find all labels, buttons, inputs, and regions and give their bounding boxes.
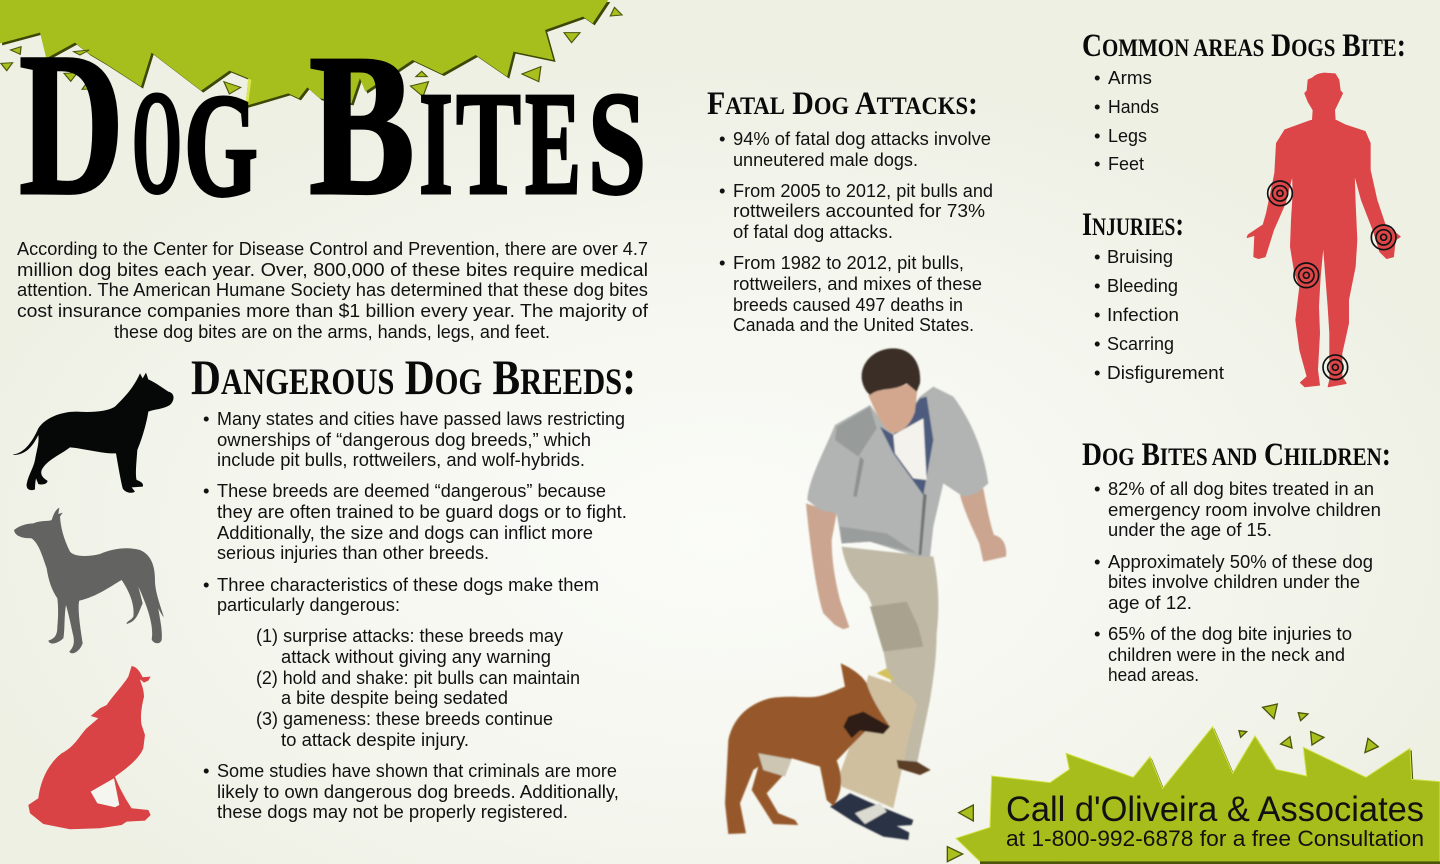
text block: fatal attacks list: From 1982 to 2012, pit bulls, (733, 252, 964, 273)
target: ankle (1323, 355, 1348, 380)
footer green starburst callout (947, 704, 1440, 864)
text block: dangerous breeds list: attack without giving any warning (281, 646, 551, 667)
text block: injuries list (1094, 246, 1224, 383)
dog (725, 663, 890, 834)
text block: dangerous breeds list (203, 408, 627, 822)
heading: Fatal Dog Attacks: FATAL DOG ATTACKS: (707, 86, 978, 122)
icon: human body with bite targets (1247, 73, 1400, 387)
text block: common areas list: Arms (1108, 67, 1152, 88)
text block: injuries list: Scarring (1107, 333, 1174, 354)
text block: dangerous breeds list: Three characteristics of these dogs make them (217, 574, 599, 595)
text block: children list: under the age of 15. (1108, 519, 1272, 540)
face (868, 383, 917, 433)
text block: dangerous breeds list: • (203, 480, 209, 501)
text block: children list (1094, 478, 1381, 685)
text block: dangerous breeds list: Many states and cities have passed laws restricting (217, 408, 625, 429)
text block: children list: • (1094, 478, 1100, 499)
title: Dog Bites: O (132, 61, 182, 225)
text block: dangerous breeds list: to attack despite injury. (281, 729, 469, 750)
text block: dangerous breeds list: Some studies have shown that criminals are more (217, 760, 617, 781)
callout text: Call d'Oliveira & Associates (1006, 790, 1424, 829)
text block: fatal attacks list: • (719, 180, 725, 201)
text block: dangerous breeds list: serious injuries than other breeds. (217, 542, 489, 563)
text block: injuries list: Disfigurement (1107, 362, 1224, 383)
text block: fatal attacks list: rottweilers accounted for 73% (733, 200, 985, 221)
target: upper arm (1268, 181, 1292, 206)
text block: fatal attacks list: 94% of fatal dog attacks involve (733, 128, 991, 149)
title: Dog Bites: T (456, 62, 521, 226)
text block: children list: bites involve children under the (1108, 571, 1360, 592)
text block: dangerous breeds list: (2) hold and shake: pit bulls can maintain (256, 667, 580, 688)
text block: common areas list: Feet (1108, 153, 1144, 174)
title: Dog Bites: S (588, 62, 646, 226)
text block: dangerous breeds list: these dogs may not be properly registered. (217, 801, 568, 822)
intro paragraph: these dog bites are on the arms, hands, legs, and feet. (114, 321, 550, 342)
heading: Common Areas Dogs Bite: COMMON AREAS DOGS BITE: (1082, 28, 1406, 64)
text block: dangerous breeds list: • (203, 408, 209, 429)
intro paragraph: cost insurance companies more than $1 billion every year. The majority of (17, 300, 649, 321)
text block: injuries list: • (1094, 333, 1100, 354)
title: Dog Bites: G (184, 64, 258, 228)
top green starburst (0, 0, 622, 108)
text block: common areas list: • (1094, 96, 1100, 117)
text block: dangerous breeds list: ownerships of “dangerous dog breeds,” which (217, 429, 591, 450)
text block: injuries list: Bleeding (1107, 275, 1178, 296)
text block: fatal attacks list (719, 128, 993, 335)
text block: injuries list: • (1094, 275, 1100, 296)
text block: fatal attacks list: unneutered male dogs. (733, 149, 918, 170)
text block: dangerous breeds list: they are often trained to be guard dogs or to fight. (217, 501, 627, 522)
title: Dog Bites: E (525, 62, 581, 226)
text block: dangerous breeds list: Additionally, the size and dogs can inflict more (217, 522, 593, 543)
hoodie (807, 387, 988, 557)
text block: dangerous breeds list: • (203, 760, 209, 781)
text block: fatal attacks list: • (719, 128, 725, 149)
text block: common areas list: • (1094, 67, 1100, 88)
heading: Dog Bites and Children: DOG BITES AND CHILDREN: (1082, 437, 1391, 473)
text block: fatal attacks list: From 2005 to 2012, pit bulls and (733, 180, 993, 201)
text block: fatal attacks list: • (719, 252, 725, 273)
text block: dangerous breeds list: a bite despite being sedated (281, 687, 508, 708)
green shard triangles (1, 7, 622, 97)
white t-shirt (893, 418, 927, 480)
text block: dangerous breeds list: particularly dangerous: (217, 594, 400, 615)
text block: children list: emergency room involve children (1108, 499, 1381, 520)
icon: grey dog silhouette (14, 508, 164, 653)
text block: fatal attacks list: Canada and the United States. (733, 314, 974, 335)
text block: children list: • (1094, 623, 1100, 644)
intro paragraph: According to the Center for Disease Control and Prevention, there are over 4.7 (17, 238, 648, 259)
text block: injuries list: Bruising (1107, 246, 1173, 267)
target: wrist (1371, 225, 1396, 250)
icon: red howling wolf silhouette (28, 666, 151, 829)
target: thigh (1294, 263, 1319, 288)
plaid shirt (880, 397, 933, 495)
text block: dangerous breeds list: include pit bulls, rottweilers, and wolf-hybrids. (217, 449, 585, 470)
text block: dangerous breeds list: • (203, 574, 209, 595)
text block: common areas list: • (1094, 125, 1100, 146)
text block: injuries list: • (1094, 246, 1100, 267)
text block: fatal attacks list: of fatal dog attacks. (733, 221, 893, 242)
right arm (960, 488, 1006, 562)
text block: common areas list: Legs (1108, 125, 1147, 146)
fabric sleeve (840, 675, 917, 808)
heading: Injuries: INJURIES: (1082, 207, 1184, 243)
photo: man with dog biting protective sleeve (725, 348, 1006, 840)
shoes (830, 793, 913, 840)
heading: Dangerous Dog Breeds: DANGEROUS DOG BREEDS: (191, 349, 636, 405)
text block: common areas list: Hands (1108, 96, 1159, 117)
pants (842, 547, 938, 773)
text block: children list: age of 12. (1108, 592, 1192, 613)
text block: dangerous breeds list: These breeds are deemed “dangerous” because (217, 480, 606, 501)
footer green starburst callout: at 1-800-992-6878 for a free Consultation (1006, 826, 1424, 851)
icon: black pit bull silhouette (13, 373, 174, 493)
text block: injuries list: • (1094, 304, 1100, 325)
text block: common areas list: • (1094, 153, 1100, 174)
text block: fatal attacks list: rottweilers, and mixes of these (733, 273, 982, 294)
text block: dangerous breeds list: (1) surprise attacks: these breeds may (256, 625, 564, 646)
text block: injuries list: • (1094, 362, 1100, 383)
green shard triangles (947, 704, 1378, 862)
text block: children list: Approximately 50% of these dog (1108, 551, 1373, 572)
text block: children list: children were in the neck and (1108, 644, 1345, 665)
text block: common areas list (1094, 67, 1159, 174)
text block: fatal attacks list: breeds caused 497 deaths in (733, 294, 963, 315)
text block: dangerous breeds list: (3) gameness: these breeds continue (256, 708, 553, 729)
intro paragraph (17, 238, 649, 342)
text block: dangerous breeds list: likely to own dangerous dog breeds. Additionally, (217, 781, 619, 802)
title: Dog Bites: B (309, 12, 415, 237)
title: Dog Bites: D (19, 11, 124, 238)
text block: injuries list: Infection (1107, 304, 1179, 325)
left arm (806, 503, 849, 629)
intro paragraph: million dog bites each year. Over, 800,000 of these bites require medical (17, 259, 648, 280)
title: Dog Bites (19, 11, 646, 238)
text block: children list: 82% of all dog bites treated in an (1108, 478, 1374, 499)
text block: children list: 65% of the dog bite injuries to (1108, 623, 1352, 644)
hair (862, 348, 920, 395)
text block: children list: head areas. (1108, 664, 1199, 685)
intro paragraph: attention. The American Humane Society has determined that these dog bites (17, 279, 648, 300)
title: Dog Bites: I (419, 62, 453, 226)
text block: children list: • (1094, 551, 1100, 572)
